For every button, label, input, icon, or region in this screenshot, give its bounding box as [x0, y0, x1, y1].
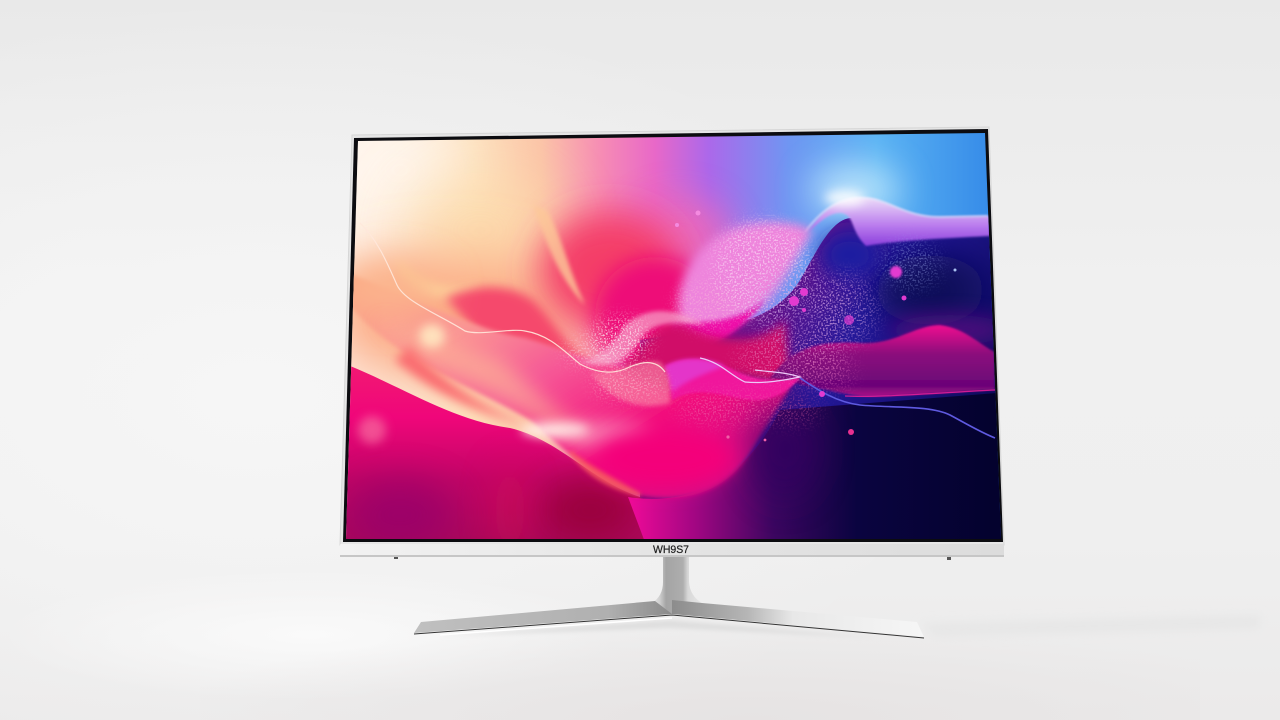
stand shadow [440, 616, 1260, 638]
crease highlight [521, 422, 589, 438]
ribbon light line [700, 358, 800, 383]
fold top blend [335, 262, 445, 314]
hot pink core [595, 428, 735, 488]
fine blue line [800, 378, 995, 438]
chin bar [340, 544, 1004, 557]
pale ribbon left [570, 311, 705, 365]
pink-lavender hill [678, 222, 812, 329]
lower orange rim [570, 452, 640, 495]
particles [675, 210, 956, 441]
upper crimson backing [620, 320, 790, 392]
stand left leg [414, 601, 672, 633]
bottom right mass [628, 392, 1010, 545]
pink glow behind hill [656, 186, 746, 265]
silver outer frame [340, 127, 1004, 545]
gold swoosh [414, 279, 472, 299]
stand [414, 556, 924, 638]
brand logo: WH9S7 [653, 544, 689, 556]
ribbon band center [665, 359, 800, 400]
stippled dot clouds [563, 220, 940, 424]
fine light line [372, 237, 666, 373]
peach lower left [325, 260, 575, 380]
right magenta wave [770, 325, 995, 396]
black bezel [343, 129, 1003, 542]
thin gold streak [533, 205, 585, 305]
blue highlight [810, 164, 900, 216]
screen artwork [346, 133, 1001, 539]
small warm glow [419, 324, 445, 348]
orange under-band [395, 345, 525, 425]
dark right region [640, 218, 1010, 545]
foot feet [394, 557, 951, 560]
red mass [540, 212, 680, 328]
lavender wave crest [808, 198, 990, 246]
stand neck [652, 556, 702, 614]
central pink fold [340, 270, 790, 498]
peach crease [405, 334, 590, 446]
stand right leg [672, 600, 924, 637]
monitor body [325, 120, 1010, 560]
scene: monitor product shot [198, 126, 1090, 720]
fold right fade [753, 402, 817, 498]
red fold [445, 287, 590, 362]
warm cream glow [355, 140, 481, 233]
bottom left mass [346, 366, 644, 539]
